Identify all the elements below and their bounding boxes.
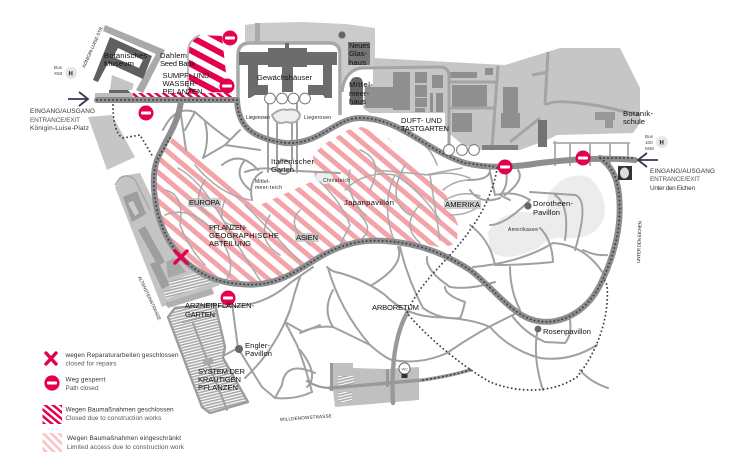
arrow: left entrance — [68, 92, 88, 106]
arrow: right entrance — [638, 153, 658, 167]
icons: WC and access Gewächshäuser — [265, 93, 310, 104]
place labels: Pavillon — [245, 349, 272, 358]
place labels: PFLANZEN — [162, 87, 202, 96]
place labels: ARZNEIPFLANZEN- — [185, 301, 254, 310]
label: entrance right — [650, 168, 715, 192]
place labels: SUMPF- UND — [162, 71, 210, 80]
place labels: Gewächshäuser — [257, 73, 312, 82]
icon: WC Arboretum — [399, 363, 410, 378]
garden: Italienischer Garten and upper paths — [163, 100, 582, 265]
legend: limited access: Limited access due to construction work — [67, 444, 185, 451]
path mesh: plant geography section — [165, 140, 480, 283]
legend: limited access: Wegen Baumaßnahmen eingeschränkt — [67, 435, 181, 442]
bus stop Unter den Eichen: Bus — [645, 134, 654, 139]
place labels: schule — [623, 117, 645, 126]
label: entrance right: Unter den Eichen — [650, 185, 695, 192]
legend: path closed: Path closed — [66, 385, 99, 392]
place labels: Italienischer — [271, 157, 314, 166]
garden: Arzneipflanzen and krautige Pflanzen — [168, 304, 248, 413]
building: bottom lot Willdenowstraße — [330, 363, 419, 407]
place labels: GEOGRAPHISCHE — [209, 231, 279, 240]
place labels: Liegerosen — [304, 115, 331, 121]
restricted area: pink stripes — [154, 127, 458, 284]
site: Altenstein lot — [115, 173, 220, 308]
bus stop Königin-Luise: X83 — [54, 71, 63, 76]
place labels: Dorotheen- — [533, 199, 573, 208]
place labels: meer-teich — [255, 185, 282, 191]
place labels: Glas- — [349, 49, 367, 58]
building: Mittelmeerhaus — [350, 77, 363, 105]
street labels — [80, 25, 642, 422]
garden pond: Chinateich — [315, 172, 333, 184]
building: Gewächshäuser — [239, 43, 337, 98]
place labels: Botanik- — [623, 109, 653, 118]
bus stop Königin-Luise: Bus — [54, 65, 63, 70]
bus stop Königin-Luise — [54, 65, 77, 79]
garden: Sumpf- und Wasserpflanzen closed hatch — [133, 35, 232, 98]
building: Neues Glashaus — [348, 42, 370, 65]
label: entrance right: ENTRANCE/EXIT — [650, 176, 700, 183]
street labels: WILLDENOWSTRASSE — [280, 413, 332, 422]
closed path icons — [138, 30, 590, 306]
street labels: ALTENSTEINSTRASSE — [137, 275, 162, 321]
legend: closed for repairs: closed for repairs — [66, 360, 116, 368]
place labels: Liegerosen — [246, 115, 270, 121]
place labels: Garten — [271, 165, 294, 174]
icon: WC Arboretum: WC — [402, 366, 408, 372]
legend: closed due to construction: Wegen Baumaßnahmen geschlossen — [66, 406, 174, 414]
place labels: PFLANZEN- — [209, 223, 247, 232]
bus stop Unter den Eichen: H — [660, 140, 664, 146]
main accessible path: thick grey road — [97, 100, 635, 322]
place labels: Chinateich — [323, 178, 350, 184]
place labels: Amerikasee — [508, 227, 538, 233]
place labels: haus — [349, 58, 366, 67]
pond: Amerikasee — [488, 176, 605, 257]
area: grounds around Gewächshäuser — [238, 22, 375, 115]
label: entrance left: Königin-Luise-Platz — [30, 125, 89, 132]
place labels: WASSER- — [162, 79, 198, 88]
place labels: DUFT- UND — [401, 116, 443, 125]
road: Willdenowstraße path and arboretum axis — [307, 313, 470, 403]
building: Botanisches Museum — [93, 25, 165, 101]
label halos behind zone names — [188, 198, 481, 242]
place labels: ASIEN — [296, 233, 318, 242]
place labels: Mittel- — [255, 179, 270, 185]
place labels: GARTEN — [185, 310, 215, 319]
bus stop Unter den Eichen: 100 — [645, 140, 653, 145]
bus stop Königin-Luise: H — [68, 72, 73, 78]
place labels: Japanpavillon — [344, 198, 394, 207]
place labels: Seed Bank — [160, 59, 195, 68]
street labels: KÖNIGIN-LUISE-STR. — [80, 25, 104, 68]
icons: WC and access Duft- und Tastgarten — [444, 145, 479, 155]
place labels: Neues — [349, 41, 370, 50]
paths: lower garden network — [205, 243, 608, 398]
place labels: TASTGARTEN — [401, 124, 449, 133]
legend: limited access — [42, 433, 185, 452]
street labels: UNTER DEN EICHEN — [636, 221, 642, 263]
place labels: Dahlem — [160, 51, 187, 60]
closed for repairs marker — [175, 251, 187, 263]
icon: ticket booth — [618, 166, 632, 180]
legend: path closed: Weg gesperrt — [66, 376, 106, 384]
legend: closed for repairs — [46, 352, 179, 368]
site: Königin-Luise-Platz — [88, 115, 135, 170]
place labels: Botanisches — [104, 51, 147, 60]
place labels: AMERIKA — [445, 200, 481, 209]
bus stop Unter den Eichen: M48 — [645, 146, 654, 151]
pavilion dots — [235, 202, 541, 353]
place labels: SYSTEM DER — [198, 367, 246, 376]
legend: closed due to construction: Closed due to construction works — [66, 415, 162, 422]
label: entrance left: EINGANG/AUSGANG — [30, 108, 95, 115]
place labels: EUROPA — [189, 198, 221, 207]
legend: path closed — [44, 375, 106, 392]
bus stop Unter den Eichen — [645, 134, 668, 151]
place labels: Engler- — [245, 341, 270, 350]
place labels: haus — [349, 97, 366, 106]
place labels: ARBORETUM — [372, 303, 419, 312]
place labels: Mittel- — [349, 80, 373, 89]
legend: closed for repairs: wegen Reparaturarbeiten geschlossen — [64, 352, 179, 359]
place labels: Rosenpavillon — [543, 327, 591, 336]
place labels: KRAUTIGEN — [198, 375, 241, 384]
legend: closed due to construction — [42, 405, 174, 424]
place labels: meer- — [349, 89, 369, 98]
label: entrance left: ENTRANCE/EXIT — [30, 117, 80, 124]
place labels: PFLANZEN — [198, 383, 238, 392]
place labels: Pavillon — [533, 208, 560, 217]
place labels — [104, 41, 653, 392]
dotted wheelchair route — [97, 100, 635, 390]
label: entrance right: EINGANG/AUSGANG — [650, 168, 715, 175]
area: Versuchsgarten and nursery — [342, 48, 640, 166]
place labels: ABTEILUNG — [209, 239, 251, 248]
label: entrance left — [30, 108, 95, 132]
place labels: Museum — [104, 59, 134, 68]
